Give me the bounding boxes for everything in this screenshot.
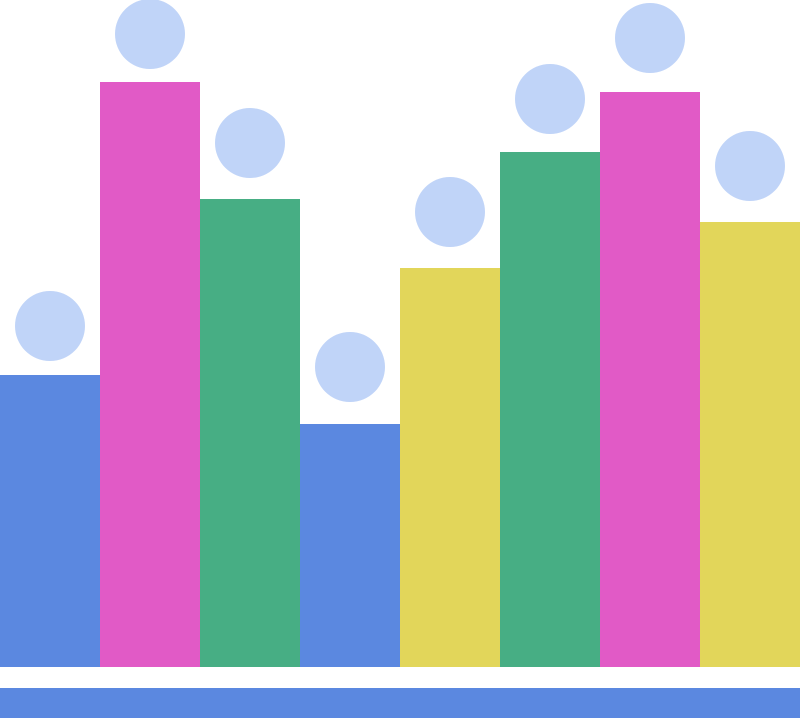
base bar [0,688,800,718]
circle markers [15,0,785,402]
